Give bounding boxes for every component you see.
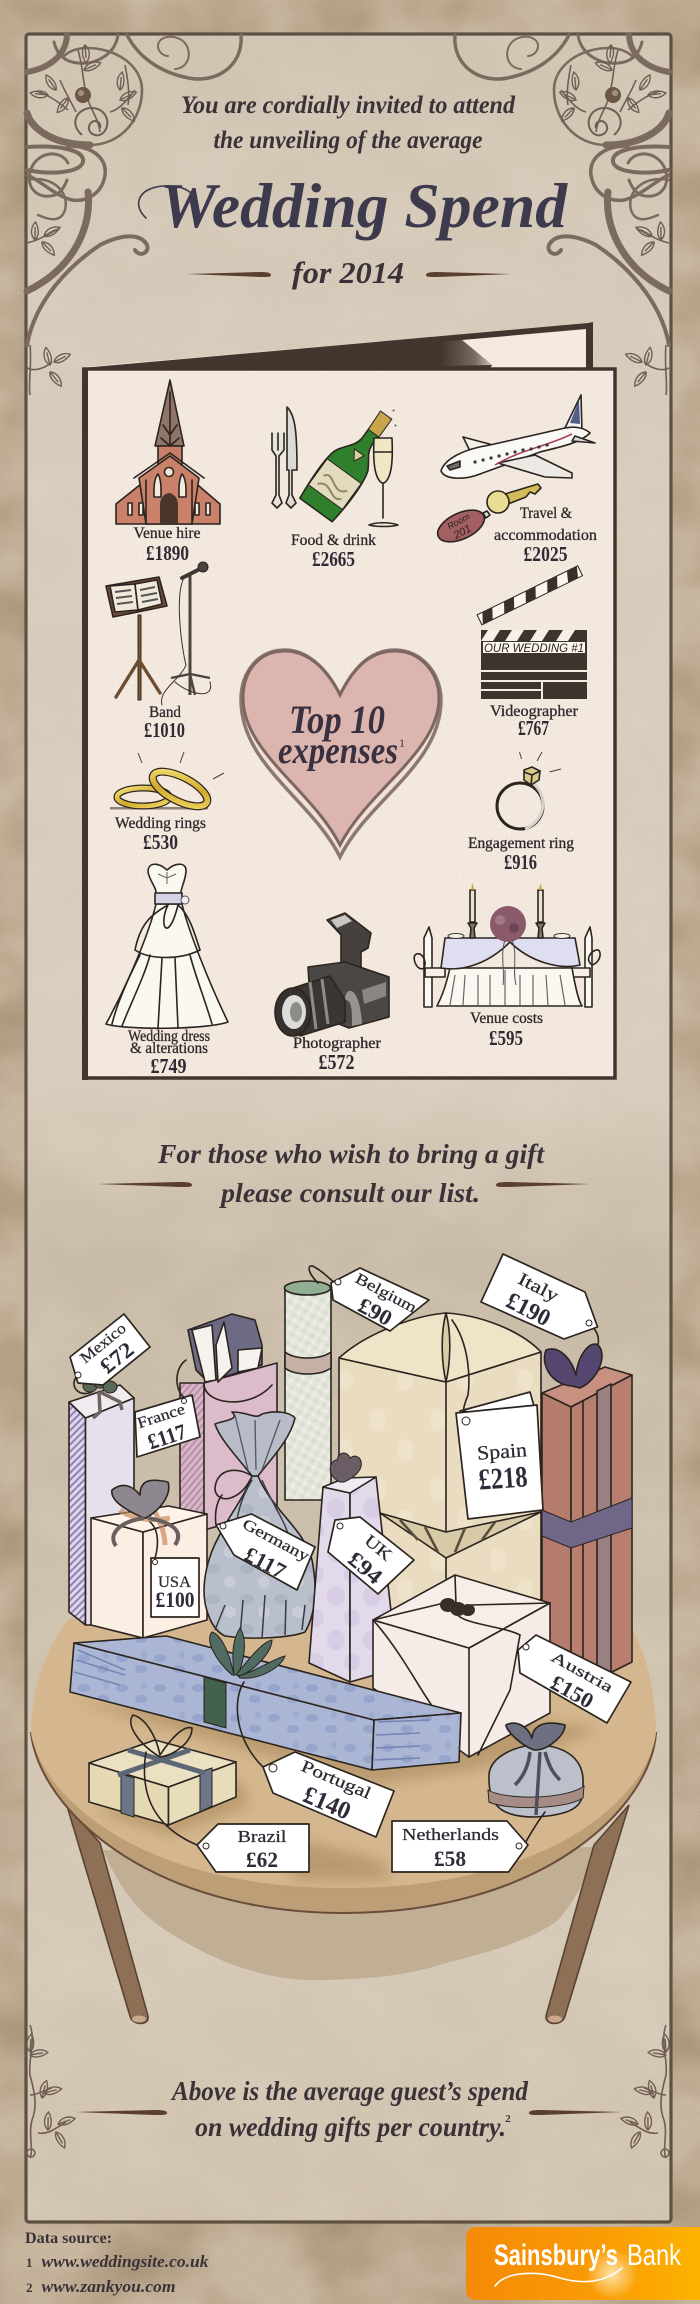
data sources: Data source: [25,2230,112,2247]
price: £916 [504,850,537,874]
icon: room key: 201 [451,523,474,542]
tag: Mexico [70,1314,150,1385]
subtitle: for 2014: for 2014 [292,255,404,290]
heart: top 10 expenses [241,650,441,857]
tag: Mexico: Mexico [77,1320,130,1367]
gift: France pink bag [177,1314,277,1530]
corner flourish left [27,35,241,395]
label: Engagement ring [468,835,574,852]
gift: Italy red box [542,1326,632,1688]
tag: Brazil: Brazil [238,1827,287,1846]
label [494,505,597,544]
tag: USA [151,1558,199,1617]
price: £595 [489,1026,523,1050]
tag: France [135,1395,200,1457]
tag: Netherlands: £58 [434,1846,466,1871]
heading: bring a gift [98,1139,590,1208]
item: band [106,562,211,742]
data sources: www.zankyou.com [42,2277,176,2296]
price: £767 [518,716,549,740]
tag: Spain: £218 [477,1460,529,1497]
gift: Portugal long blue box [70,1628,461,1770]
icon: gold rings [110,752,224,813]
label: & alterations [130,1040,208,1057]
caption: gifts per country: 2 [505,2113,511,2125]
icon: church [116,380,220,524]
subtitle: for 2014 [187,255,511,290]
item: food and drink [272,402,403,571]
icon: clapperboard: OUR WEDDING #1 [484,643,584,655]
tag: France: £117 [144,1419,189,1454]
data sources [25,2230,209,2296]
label: Wedding rings [115,815,206,832]
gift: Germany bag [204,1412,315,1638]
tag: Belgium: £90 [354,1292,397,1331]
header text [181,92,515,154]
caption: gifts per country: Above is the average guest’s spend [170,2076,528,2106]
label: Wedding dress [128,1028,210,1045]
icon: diamond ring [497,752,561,829]
price: £1890 [146,541,189,565]
tag: Germany [216,1514,315,1590]
icon: music stand [106,577,167,700]
card: front panel [82,369,615,1080]
logo: Sainsbury's Bank: Bank [627,2239,682,2272]
gift: Spain cream box [339,1313,541,1640]
price: £1010 [144,718,185,742]
item: engagement ring [468,752,574,874]
tag: Portugal: £140 [299,1781,355,1825]
icon: room key: Room [446,511,472,531]
header text: the unveiling of the average [214,127,482,154]
tag: Austria [518,1635,631,1723]
tag: Spain: Spain [476,1439,528,1465]
label: Band [149,704,181,721]
icon: dressed table [414,883,600,1007]
item: travel and accommodation [433,395,597,566]
tag: France: France [135,1401,187,1432]
tag: UK: £94 [343,1546,388,1589]
sprig bottom left [26,2025,76,2158]
item: photographer [275,913,389,1074]
tag: Italy: Italy [515,1268,562,1306]
item: wedding dress [106,864,228,1078]
price: £2665 [312,547,355,571]
tag: Netherlands: Netherlands [402,1825,499,1844]
tag: Brazil [197,1824,309,1872]
caption: gifts per country [75,2076,622,2142]
table legs [67,1805,629,2024]
logo: Sainsbury's Bank: Sainsbury’s [494,2239,618,2272]
table top [31,1590,656,1913]
tag: Austria: £150 [547,1670,598,1713]
label: Venue costs [470,1010,543,1027]
tag: Mexico: £72 [95,1337,139,1379]
tag: UK [328,1517,414,1594]
gift: Brazil box [89,1715,236,1845]
data sources: 1 [26,2255,32,2270]
logo: Sainsbury's Bank [466,2227,700,2300]
data sources: 2 [26,2280,32,2295]
gift: UK tall box [309,1453,392,1682]
tag: Brazil: £62 [246,1847,278,1872]
price: £572 [318,1050,354,1074]
price: £530 [143,830,178,854]
icon: cutlery [272,407,297,508]
tag: Germany: £117 [240,1541,290,1584]
table shadow [103,1847,594,1980]
tag: Austria: Austria [548,1649,616,1696]
label: Photographer [293,1035,382,1052]
tag: Italy: £190 [502,1288,554,1332]
label [128,1028,210,1057]
tag: Belgium: Belgium [352,1270,419,1317]
header text: You are cordially invited to attend [181,92,515,119]
data sources: www.weddingsite.co.uk [42,2252,209,2271]
price: £749 [150,1054,186,1078]
heading: bring a gift: please consult our list. [219,1178,480,1208]
tag: Belgium [331,1268,429,1331]
icon: aeroplane [441,395,595,478]
icon: dress [106,864,228,1028]
title: Wedding Spend: Wedding Spend [160,170,568,241]
label: Venue hire [134,525,201,542]
tag: Spain [456,1392,543,1519]
item: venue costs [414,883,600,1050]
label: Videographer [490,703,579,720]
tag: UK: UK [361,1531,397,1565]
item: videographer [477,566,587,740]
icon: microphone [162,562,211,705]
tag: Portugal [263,1752,394,1837]
gift: Netherlands bag [488,1723,584,1845]
card: back page [82,322,593,370]
icon: camera [275,913,389,1036]
tag: Portugal: Portugal [298,1756,374,1803]
icon: champagne flute [369,410,398,526]
gift: Belgium paper roll [284,1266,336,1500]
tag: USA: USA [158,1574,192,1591]
gift: Mexico tall box [69,1375,134,1625]
tag: Italy [481,1254,598,1339]
sprig bottom right [620,2025,670,2158]
label: accommodation [494,527,597,544]
label: Food & drink [291,532,376,549]
icon: clapperboard [477,566,587,699]
icon: champagne bottle [298,402,403,523]
tag: Netherlands [392,1821,528,1872]
icon: room key [433,484,541,548]
gift: Austria envelope box [373,1575,550,1757]
caption: gifts per country: on wedding gifts per country. [195,2112,506,2142]
heading: bring a gift: For those who wish to bring a gift [157,1139,546,1169]
label: Travel & [520,505,572,522]
price: £2025 [524,542,568,566]
tag: Germany: Germany [240,1516,312,1565]
tag: USA: £100 [156,1587,194,1612]
heart: top 10 expenses: expenses [278,730,398,772]
heart: top 10 expenses: Top 10 [289,697,385,742]
item: wedding rings [110,752,224,854]
gift: USA box [91,1480,207,1638]
heart: top 10 expenses: 1 [399,736,405,750]
item: venue hire [116,380,220,565]
corner flourish right [455,35,669,395]
